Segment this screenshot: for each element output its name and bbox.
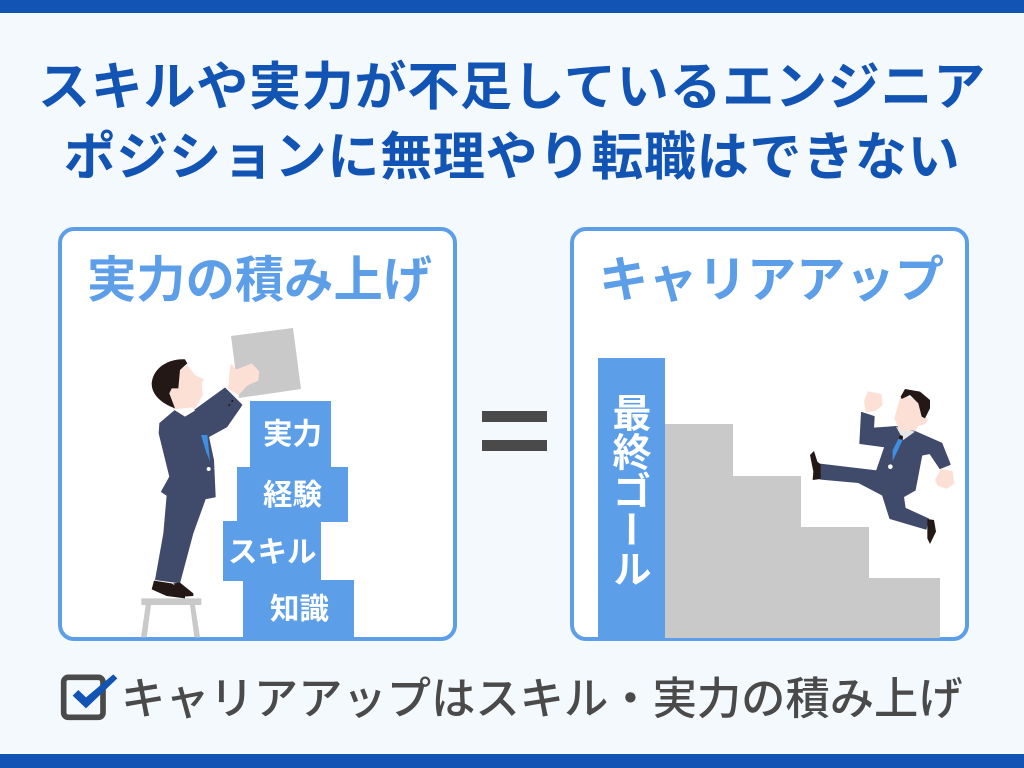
title line 2: ポジションに無理やり転職はできない [64, 129, 960, 187]
bottom bar [0, 754, 1024, 768]
title [38, 59, 986, 187]
gray block being lifted [231, 328, 301, 398]
panel: キャリアアップ [570, 227, 969, 641]
goal label: 最終ゴール: 最終ゴール [607, 393, 650, 588]
final goal bar [598, 358, 665, 638]
top bar [0, 0, 1024, 13]
block label: 実力: 実力 [263, 418, 322, 451]
stack of blocks [223, 401, 354, 638]
equals sign [482, 411, 547, 451]
icon: checkbox [64, 674, 117, 717]
panel: 実力の積み上げ [58, 227, 457, 641]
title line 1: スキルや実力が不足しているエンジニア [38, 59, 986, 117]
staircase [665, 424, 940, 638]
heading: キャリアアップ: キャリアアップ [599, 253, 944, 308]
block label: 知識: 知識 [270, 593, 329, 626]
block label: スキル: スキル [228, 536, 317, 569]
block label: 経験: 経験 [263, 479, 322, 512]
bottom caption: キャリアアップはスキル・実力の積み上げ [121, 675, 963, 724]
heading: 実力の積み上げ: 実力の積み上げ [87, 253, 432, 308]
man running up the stairs [810, 389, 953, 544]
man stacking blocks on a stool [141, 359, 258, 637]
